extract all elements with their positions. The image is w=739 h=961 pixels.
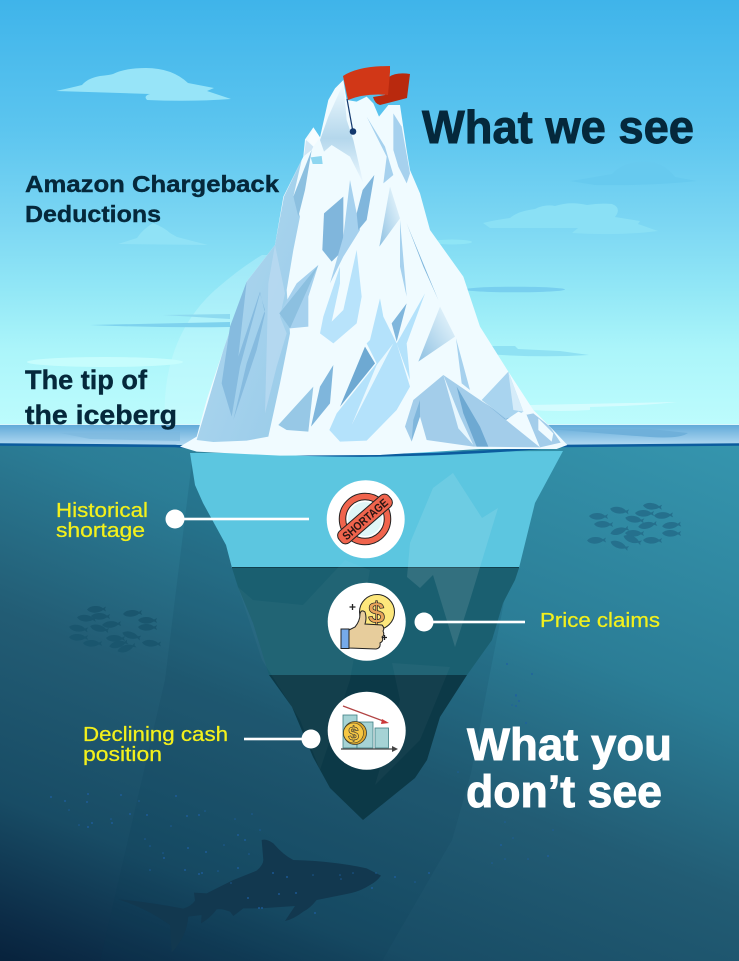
icon: thumbs up with coin: $	[368, 597, 385, 630]
heading: what you don't see: don’t see	[466, 766, 662, 817]
label: declining cash position	[83, 724, 228, 766]
flag	[343, 66, 410, 135]
heading: amazon chargeback deductions: Deductions	[25, 201, 161, 227]
fish school: left	[69, 605, 161, 655]
cloud: right	[483, 203, 658, 234]
underwater background	[0, 445, 739, 961]
label: price claims: Price claims	[540, 610, 660, 632]
ghost reflection	[407, 473, 498, 647]
heading: the tip of the iceberg: The tip of	[25, 365, 148, 395]
heading: what you don't see	[466, 719, 672, 817]
facets	[222, 83, 561, 447]
label: historical shortage: Historical	[56, 500, 148, 522]
connector: price claims	[414, 612, 525, 632]
icon: declining chart with coin: $	[348, 724, 359, 745]
shark	[118, 840, 381, 953]
sky background	[0, 0, 739, 426]
speckles	[50, 663, 554, 914]
cloud: top left	[56, 68, 231, 101]
heading: the tip of the iceberg	[25, 365, 177, 430]
icon: shortage	[327, 480, 405, 558]
label: historical shortage	[56, 500, 148, 542]
left shaded face	[197, 160, 302, 442]
submerged iceberg	[190, 451, 563, 820]
cloud streaks	[27, 240, 677, 411]
layer: bottom	[269, 675, 467, 820]
layer: top	[190, 451, 563, 568]
heading: amazon chargeback deductions: Amazon Chargeback	[25, 171, 280, 197]
icon: thumbs up with coin	[328, 583, 406, 661]
heading: the tip of the iceberg: the iceberg	[25, 400, 177, 430]
icon: declining chart with coin	[328, 692, 406, 770]
connector: declining cash	[244, 730, 320, 748]
label: historical shortage: shortage	[56, 520, 145, 542]
iceberg	[180, 80, 567, 456]
heading: amazon chargeback deductions	[25, 171, 280, 227]
cloud: faint upper right	[570, 162, 697, 185]
glow behind iceberg	[165, 255, 300, 426]
label: declining cash position: position	[83, 744, 162, 766]
layer: middle	[232, 568, 519, 675]
cloud: under deductions	[118, 223, 208, 245]
connector: historical shortage	[166, 510, 309, 528]
darker light-ray wedge	[100, 453, 561, 961]
sea surface band	[0, 424, 739, 446]
heading: what you don't see: What you	[467, 719, 672, 770]
iceberg body	[180, 80, 567, 456]
heading: what we see: What we see	[422, 101, 694, 153]
icon: shortage: SHORTAGE	[341, 497, 391, 543]
waterline	[0, 444, 739, 456]
fish school: right	[587, 502, 681, 552]
label: declining cash position: Declining cash	[83, 724, 228, 746]
